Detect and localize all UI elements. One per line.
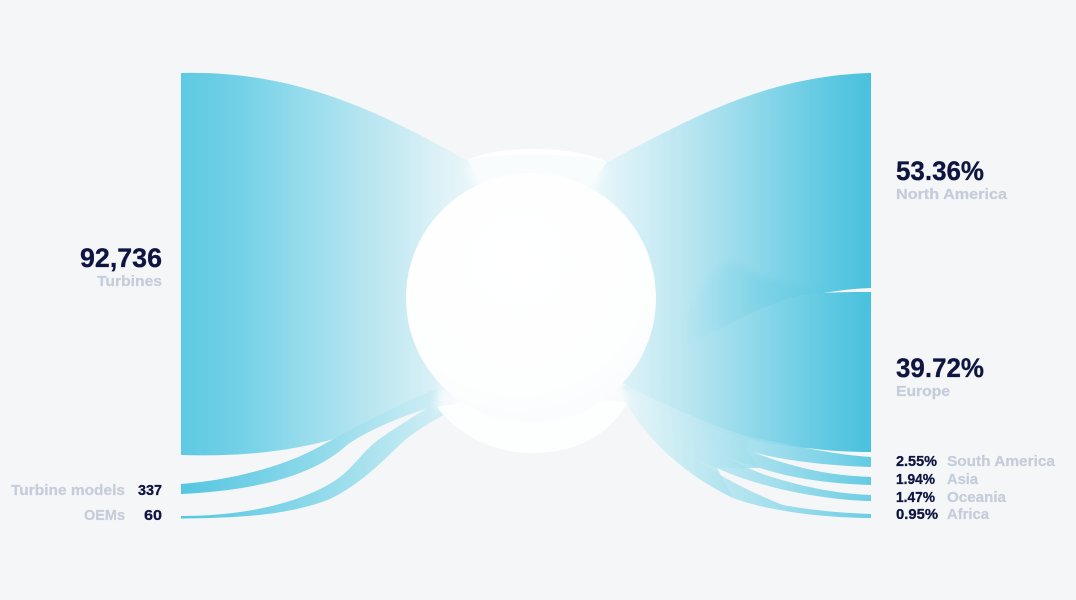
sankey chart	[181, 73, 871, 518]
label: North America	[896, 156, 1008, 203]
label: OEMs: OEMs	[84, 507, 125, 524]
centre haze: top	[466, 165, 606, 200]
label: turbine models: 337	[138, 482, 162, 499]
label: turbines: Turbines	[97, 273, 162, 290]
label: North America: North America	[896, 186, 1008, 203]
label: OEMs: 60	[144, 507, 162, 524]
band: turbines	[181, 73, 530, 455]
label: Asia	[896, 471, 979, 488]
label: Oceania: 1.47%	[896, 489, 935, 506]
label: Europe	[896, 353, 984, 400]
label: Oceania	[896, 489, 1007, 506]
label: Africa: Africa	[947, 506, 990, 523]
bottom lens	[437, 395, 627, 453]
label: Africa: 0.95%	[896, 506, 938, 523]
label: South America: 2.55%	[896, 453, 937, 470]
band: North America lower shadow	[686, 262, 840, 347]
band: turbine models	[181, 385, 455, 494]
label: Asia: Asia	[947, 471, 979, 488]
band: South America	[625, 385, 871, 467]
centre haze: bottom	[436, 385, 628, 408]
band: Asia	[625, 388, 871, 485]
label: Oceania: Oceania	[947, 489, 1007, 506]
white circle	[406, 173, 656, 423]
label: South America	[896, 453, 1056, 470]
band: Africa	[623, 397, 871, 518]
label: turbines: 92,736	[80, 243, 162, 273]
label: Africa	[896, 506, 990, 523]
band: Oceania	[625, 392, 871, 501]
label: Europe: 39.72%	[896, 353, 984, 383]
label: South America: South America	[947, 453, 1056, 470]
band: North America	[560, 73, 871, 385]
top lens	[468, 149, 607, 186]
band: OEMs	[181, 398, 462, 518]
top lens rim	[468, 149, 607, 162]
band: Europe	[622, 292, 871, 452]
band: fan under small flows	[622, 388, 760, 498]
label: OEMs	[84, 507, 162, 524]
label: North America: 53.36%	[896, 156, 984, 186]
label: turbine models: Turbine models	[11, 482, 125, 499]
label: Europe: Europe	[896, 383, 950, 400]
label: turbines	[80, 243, 162, 290]
label: Asia: 1.94%	[896, 471, 935, 488]
